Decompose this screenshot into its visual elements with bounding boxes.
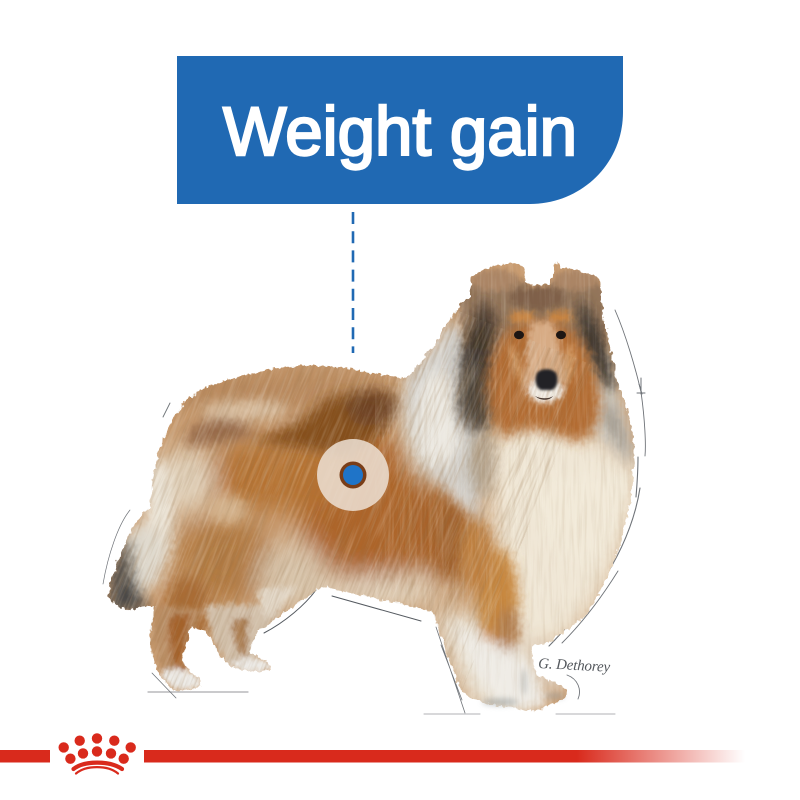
- dog fur texture: [109, 263, 629, 711]
- title text: Weight gain: [223, 93, 577, 170]
- dog face features: [514, 331, 566, 400]
- dashed connector line: [352, 212, 354, 353]
- title banner: [177, 56, 623, 204]
- pencil sketch lines: [103, 310, 645, 714]
- red brand stripe: [0, 750, 745, 762]
- dog left eye: [514, 331, 524, 339]
- icon: royal crown logo: [58, 733, 136, 774]
- highlight marker on flank: [317, 439, 389, 511]
- illustration: rough collie dog: [107, 262, 635, 712]
- dog right eye: [556, 331, 566, 339]
- artist signature: G. Dethorey: [538, 656, 611, 676]
- dog mouth: [535, 396, 553, 400]
- dog nose: [536, 369, 557, 390]
- dog mane: [406, 318, 634, 520]
- dog paw shading: [482, 669, 565, 706]
- dog head coat: [457, 269, 616, 442]
- dog body coat: [110, 368, 468, 644]
- dog hind legs: [154, 585, 300, 690]
- dog front legs and chest: [402, 365, 640, 712]
- dog coat colour masses: [107, 262, 635, 712]
